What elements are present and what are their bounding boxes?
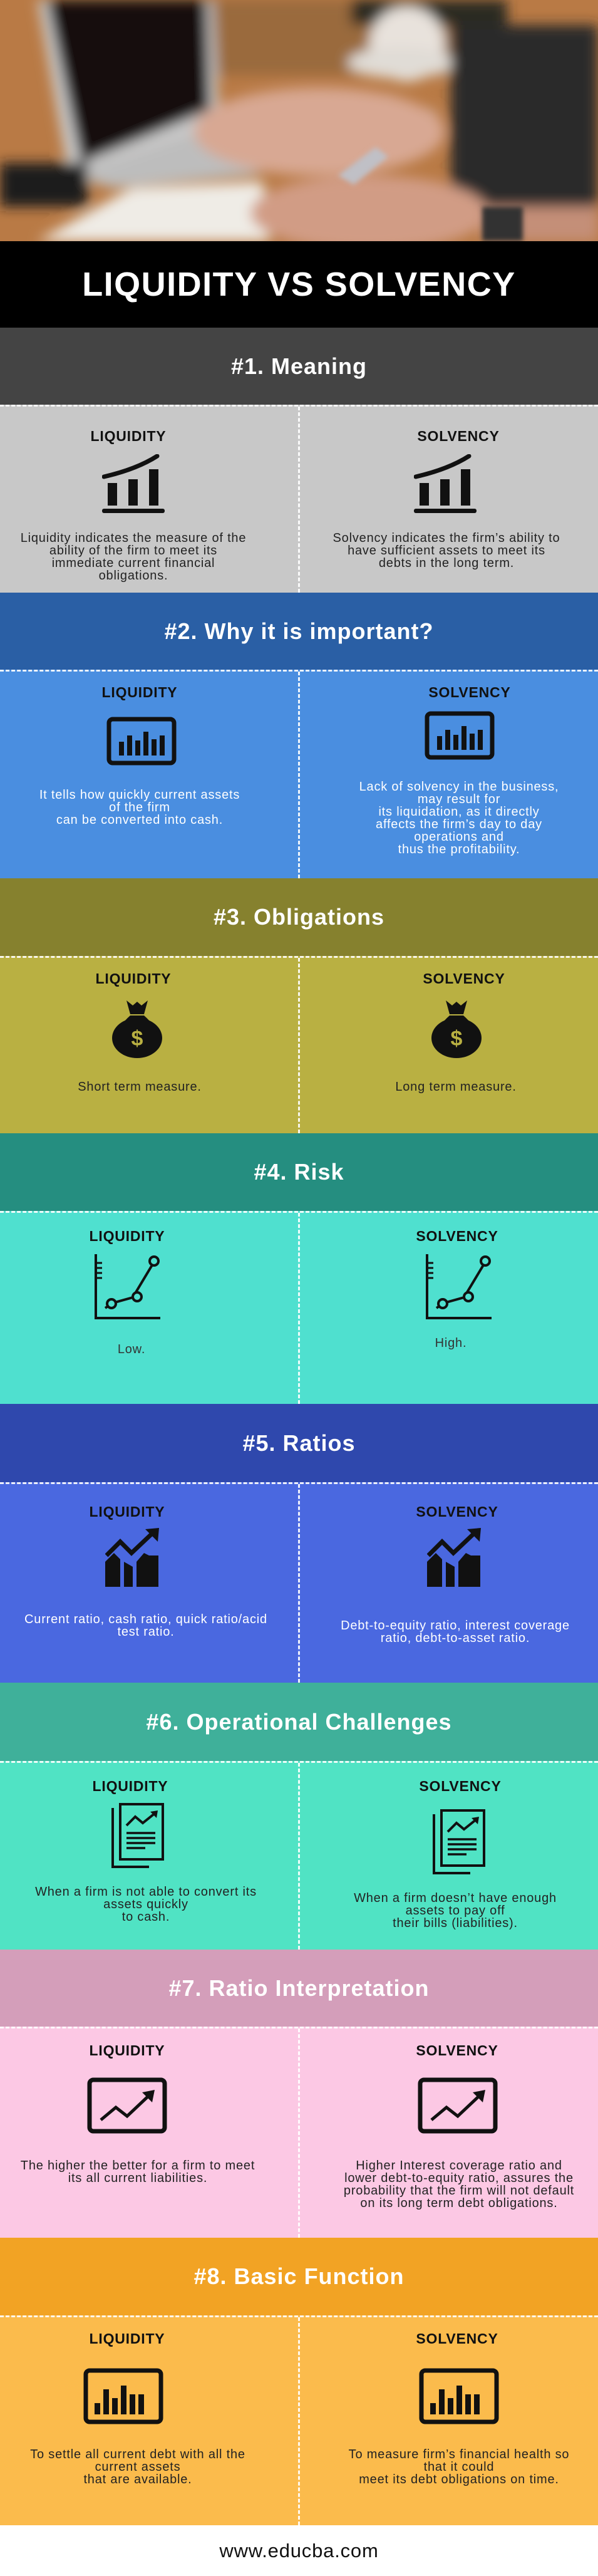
icon: report document (433, 1809, 485, 1874)
text: solvency meaning: have sufficient assets to meet its (348, 544, 545, 558)
text: liquidity ratios (24, 1613, 267, 1639)
text: solvency importance: Lack of solvency in the business, (359, 780, 559, 794)
text: liquidity meaning: obligations. (99, 569, 168, 583)
panel: ratio interpretation (0, 2027, 598, 2238)
icon: monitor chart (420, 2368, 498, 2424)
text: solvency importance: operations and (414, 830, 504, 844)
label: solvency: SOLVENCY (423, 970, 505, 987)
section 1 header: #1. Meaning (231, 353, 367, 378)
text: solvency importance: affects the firm’s day to day (376, 818, 542, 831)
label: liquidity: LIQUIDITY (93, 1778, 168, 1794)
text: liquidity function (30, 2448, 245, 2486)
section 2 header: #2. Why it is important? (164, 618, 434, 644)
photo: hands with pen and laptop (0, 0, 598, 241)
section 7 header: #7. Ratio Interpretation (168, 1975, 430, 2001)
panel: basic function (0, 2315, 598, 2525)
label: solvency: SOLVENCY (417, 428, 500, 444)
footer: website: www.educba.com (219, 2540, 379, 2561)
text: liquidity challenge: to cash. (122, 1910, 170, 1924)
text: liquidity meaning: immediate current financial (52, 556, 215, 570)
panel: risk (0, 1211, 598, 1404)
text: liquidity ratios: Current ratio, cash ratio, quick ratio/acid (24, 1613, 267, 1626)
text: high: High. (435, 1336, 467, 1350)
icon: trend frame (418, 2077, 497, 2134)
label: liquidity: LIQUIDITY (90, 1228, 165, 1244)
section 1 header (0, 328, 598, 405)
icon: money bag (431, 1000, 482, 1058)
panel: importance (0, 670, 598, 878)
text: liquidity meaning (21, 531, 246, 583)
section 2 header (0, 593, 598, 670)
text: liquidity importance: can be converted into cash. (56, 813, 223, 827)
text: solvency ratios (341, 1619, 570, 1645)
icon: trend frame (88, 2077, 167, 2134)
panel: meaning (0, 405, 598, 593)
icon: monitor chart (425, 712, 495, 759)
text: solvency importance: may result for (418, 792, 500, 806)
text: liquidity function: current assets (95, 2460, 180, 2474)
label: solvency: SOLVENCY (416, 2042, 498, 2059)
icon: bar chart with curve (414, 454, 477, 513)
text: liquidity challenge: assets quickly (103, 1898, 188, 1911)
text: liquidity challenge (35, 1885, 257, 1924)
section 4 header: #4. Risk (254, 1159, 344, 1185)
text: liquidity interpretation: The higher the better for a firm to meet (21, 2159, 255, 2173)
icon: monitor chart (84, 2368, 163, 2424)
text: solvency ratios: ratio, debt-to-asset ratio. (381, 1631, 530, 1645)
text: solvency challenge (354, 1891, 557, 1930)
label: solvency: SOLVENCY (416, 1504, 498, 1520)
text: solvency challenge: When a firm doesn’t have enough (354, 1891, 557, 1905)
icon: money bag: $ (451, 1027, 463, 1051)
text: liquidity ratios: test ratio. (117, 1625, 175, 1639)
text: low: Low. (118, 1343, 145, 1356)
text: solvency importance (359, 780, 559, 856)
panel: obligations (0, 956, 598, 1133)
text: solvency meaning: debts in the long term. (379, 556, 514, 570)
text: long term: Long term measure. (395, 1080, 517, 1094)
panel: ratios (0, 1482, 598, 1683)
label: liquidity: LIQUIDITY (90, 2042, 165, 2059)
text: solvency interpretation (344, 2159, 574, 2210)
section 8 header: #8. Basic Function (193, 2263, 405, 2289)
section 8 header (0, 2238, 598, 2315)
text: liquidity meaning: Liquidity indicates the measure of the (21, 531, 246, 545)
text: liquidity importance: of the firm (109, 801, 170, 814)
label: liquidity: LIQUIDITY (90, 1504, 165, 1520)
text: short term: Short term measure. (78, 1080, 202, 1094)
title banner: LIQUIDITY VS SOLVENCY (82, 266, 516, 303)
icon: money bag (112, 1000, 162, 1058)
section 6 header (0, 1683, 598, 1761)
text: solvency ratios: Debt-to-equity ratio, interest coverage (341, 1619, 570, 1633)
text: liquidity importance (39, 788, 240, 827)
text: solvency interpretation: lower debt-to-equity ratio, assures the (344, 2171, 574, 2185)
label: liquidity: LIQUIDITY (96, 970, 171, 987)
icon: monitor chart (106, 717, 177, 766)
section 5 header (0, 1404, 598, 1482)
text: solvency importance: thus the profitability. (398, 843, 520, 856)
text: solvency interpretation: on its long term debt obligations. (360, 2196, 558, 2210)
text: solvency challenge: their bills (liabilities). (393, 1916, 518, 1930)
text: liquidity function: To settle all current debt with all the (30, 2448, 245, 2461)
panel: operational challenges (0, 1761, 598, 1950)
section 7 header (0, 1950, 598, 2027)
text: solvency challenge: assets to pay off (406, 1904, 505, 1918)
title banner (0, 241, 598, 328)
text: liquidity meaning: ability of the firm to meet its (49, 544, 217, 558)
label: liquidity: LIQUIDITY (102, 684, 177, 700)
text: solvency meaning: Solvency indicates the firm’s ability to (333, 531, 560, 545)
label: liquidity: LIQUIDITY (91, 428, 166, 444)
text: solvency function (349, 2448, 569, 2486)
text: solvency importance: its liquidation, as it directly (378, 805, 540, 819)
label: liquidity: LIQUIDITY (90, 2330, 165, 2347)
text: liquidity interpretation (21, 2159, 255, 2185)
section 5 header: #5. Ratios (242, 1430, 356, 1456)
label: solvency: SOLVENCY (419, 1778, 502, 1794)
text: solvency meaning (333, 531, 560, 570)
icon: money bag: $ (131, 1027, 143, 1051)
section 3 header: #3. Obligations (214, 904, 384, 930)
label: solvency: SOLVENCY (416, 2330, 498, 2347)
label: solvency: SOLVENCY (416, 1228, 498, 1244)
icon: growth chart (105, 1528, 159, 1587)
text: solvency interpretation: Higher Interest coverage ratio and (356, 2159, 562, 2173)
section 6 header: #6. Operational Challenges (146, 1709, 452, 1734)
text: liquidity challenge: When a firm is not able to convert its (35, 1885, 257, 1899)
text: liquidity function: that are available. (83, 2473, 192, 2486)
section 4 header (0, 1133, 598, 1211)
text: solvency function: meet its debt obligations on time. (359, 2473, 559, 2486)
icon: bar chart with curve (102, 454, 165, 513)
icon: report document (111, 1803, 164, 1868)
label: solvency: SOLVENCY (428, 684, 511, 700)
icon: line graph (426, 1254, 492, 1319)
icon: growth chart (427, 1528, 481, 1587)
text: solvency interpretation: probability that the firm will not default (344, 2184, 574, 2198)
section 3 header (0, 878, 598, 956)
text: solvency function: To measure firm’s financial health so (349, 2448, 569, 2461)
text: solvency function: that it could (424, 2460, 494, 2474)
text: liquidity interpretation: its all current liabilities. (68, 2171, 207, 2185)
icon: line graph (95, 1254, 160, 1319)
text: liquidity importance: It tells how quickly current assets (39, 788, 240, 802)
